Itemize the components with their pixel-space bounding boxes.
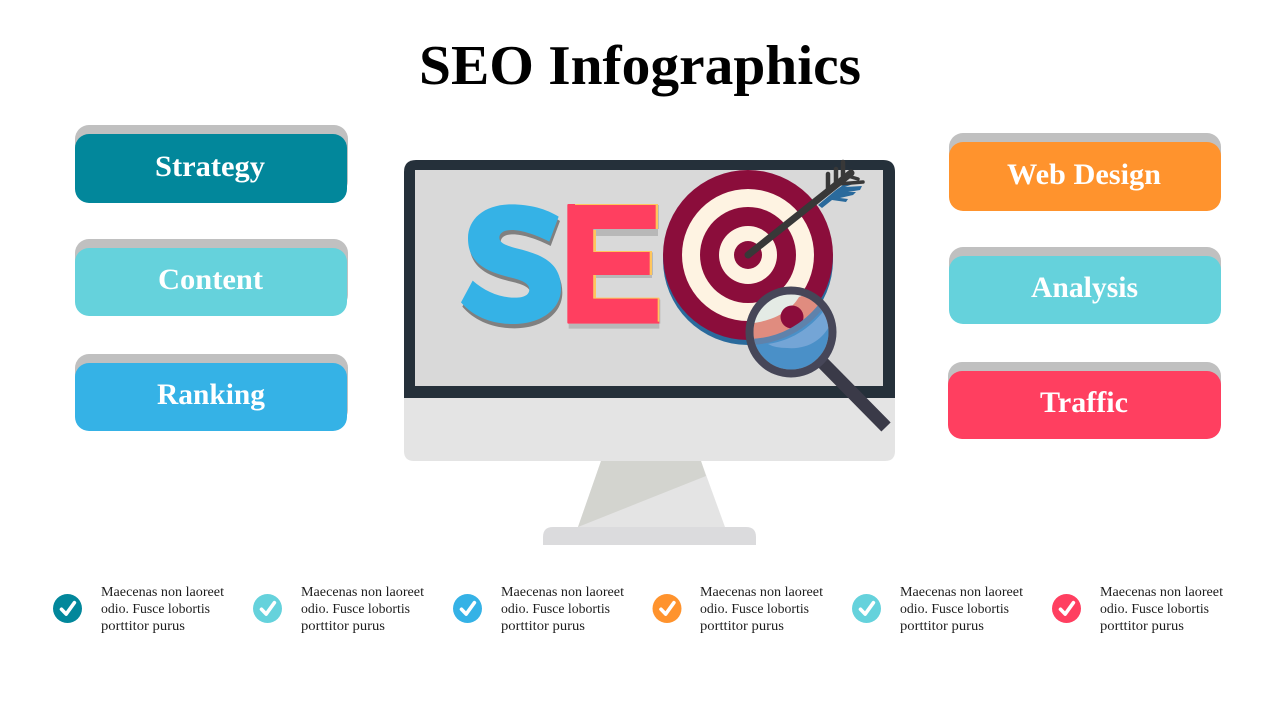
lens contents [754,294,828,370]
bullet 4: odio. Fusce lobortis [700,601,809,616]
button: Web Design: Web Design [1007,158,1161,191]
button: Ranking [75,354,348,431]
magnifying glass [745,290,886,427]
bullet 2: odio. Fusce lobortis [301,601,410,616]
button: Strategy: Strategy [155,150,265,183]
target rings [663,170,833,340]
bullet 6: porttitor purus [1100,618,1184,633]
bullet 4: Maecenas non laoreet [700,584,823,599]
bullet 2 [253,584,424,633]
bullet 3: odio. Fusce lobortis [501,601,610,616]
bullet 1: Maecenas non laoreet [101,584,224,599]
bullet 6: odio. Fusce lobortis [1100,601,1209,616]
target shadow [663,175,833,345]
button: Analysis: Analysis [1031,271,1138,304]
button: Traffic [948,362,1221,439]
bullet 6: Maecenas non laoreet [1100,584,1223,599]
bullet 4 [652,584,823,633]
letter E [567,204,660,329]
bullet 4: porttitor purus [700,618,784,633]
button: Traffic: Traffic [1040,386,1128,419]
title: SEO Infographics [419,35,861,97]
infographic canvas [53,44,1223,633]
letter S [461,204,562,328]
monitor chin [404,397,895,461]
arrow [748,162,863,255]
button: Web Design [949,133,1221,211]
monitor [404,160,895,545]
button: Strategy [75,125,348,203]
bullet 5: porttitor purus [900,618,984,633]
monitor stand [543,461,756,545]
target with arrow [663,162,863,345]
bullet 3 [453,584,624,633]
button: Ranking: Ranking [157,378,265,411]
monitor bezel [404,160,895,398]
monitor screen [415,170,883,386]
bullet 2: porttitor purus [301,618,385,633]
bullet 5 [852,584,1023,633]
bullet 1: odio. Fusce lobortis [101,601,210,616]
bullet 2: Maecenas non laoreet [301,584,424,599]
button: Analysis [949,247,1221,324]
lens rim [750,290,832,374]
bullet 6 [1052,584,1223,633]
arrow shadow [818,183,862,208]
bullet 5: Maecenas non laoreet [900,584,1023,599]
bullet 3: porttitor purus [501,618,585,633]
handle [823,363,886,427]
button: Content: Content [158,263,263,296]
bullet 3: Maecenas non laoreet [501,584,624,599]
bullet 5: odio. Fusce lobortis [900,601,1009,616]
button: Content [75,239,348,316]
bullet 1 [53,584,224,633]
bullet 1: porttitor purus [101,618,185,633]
